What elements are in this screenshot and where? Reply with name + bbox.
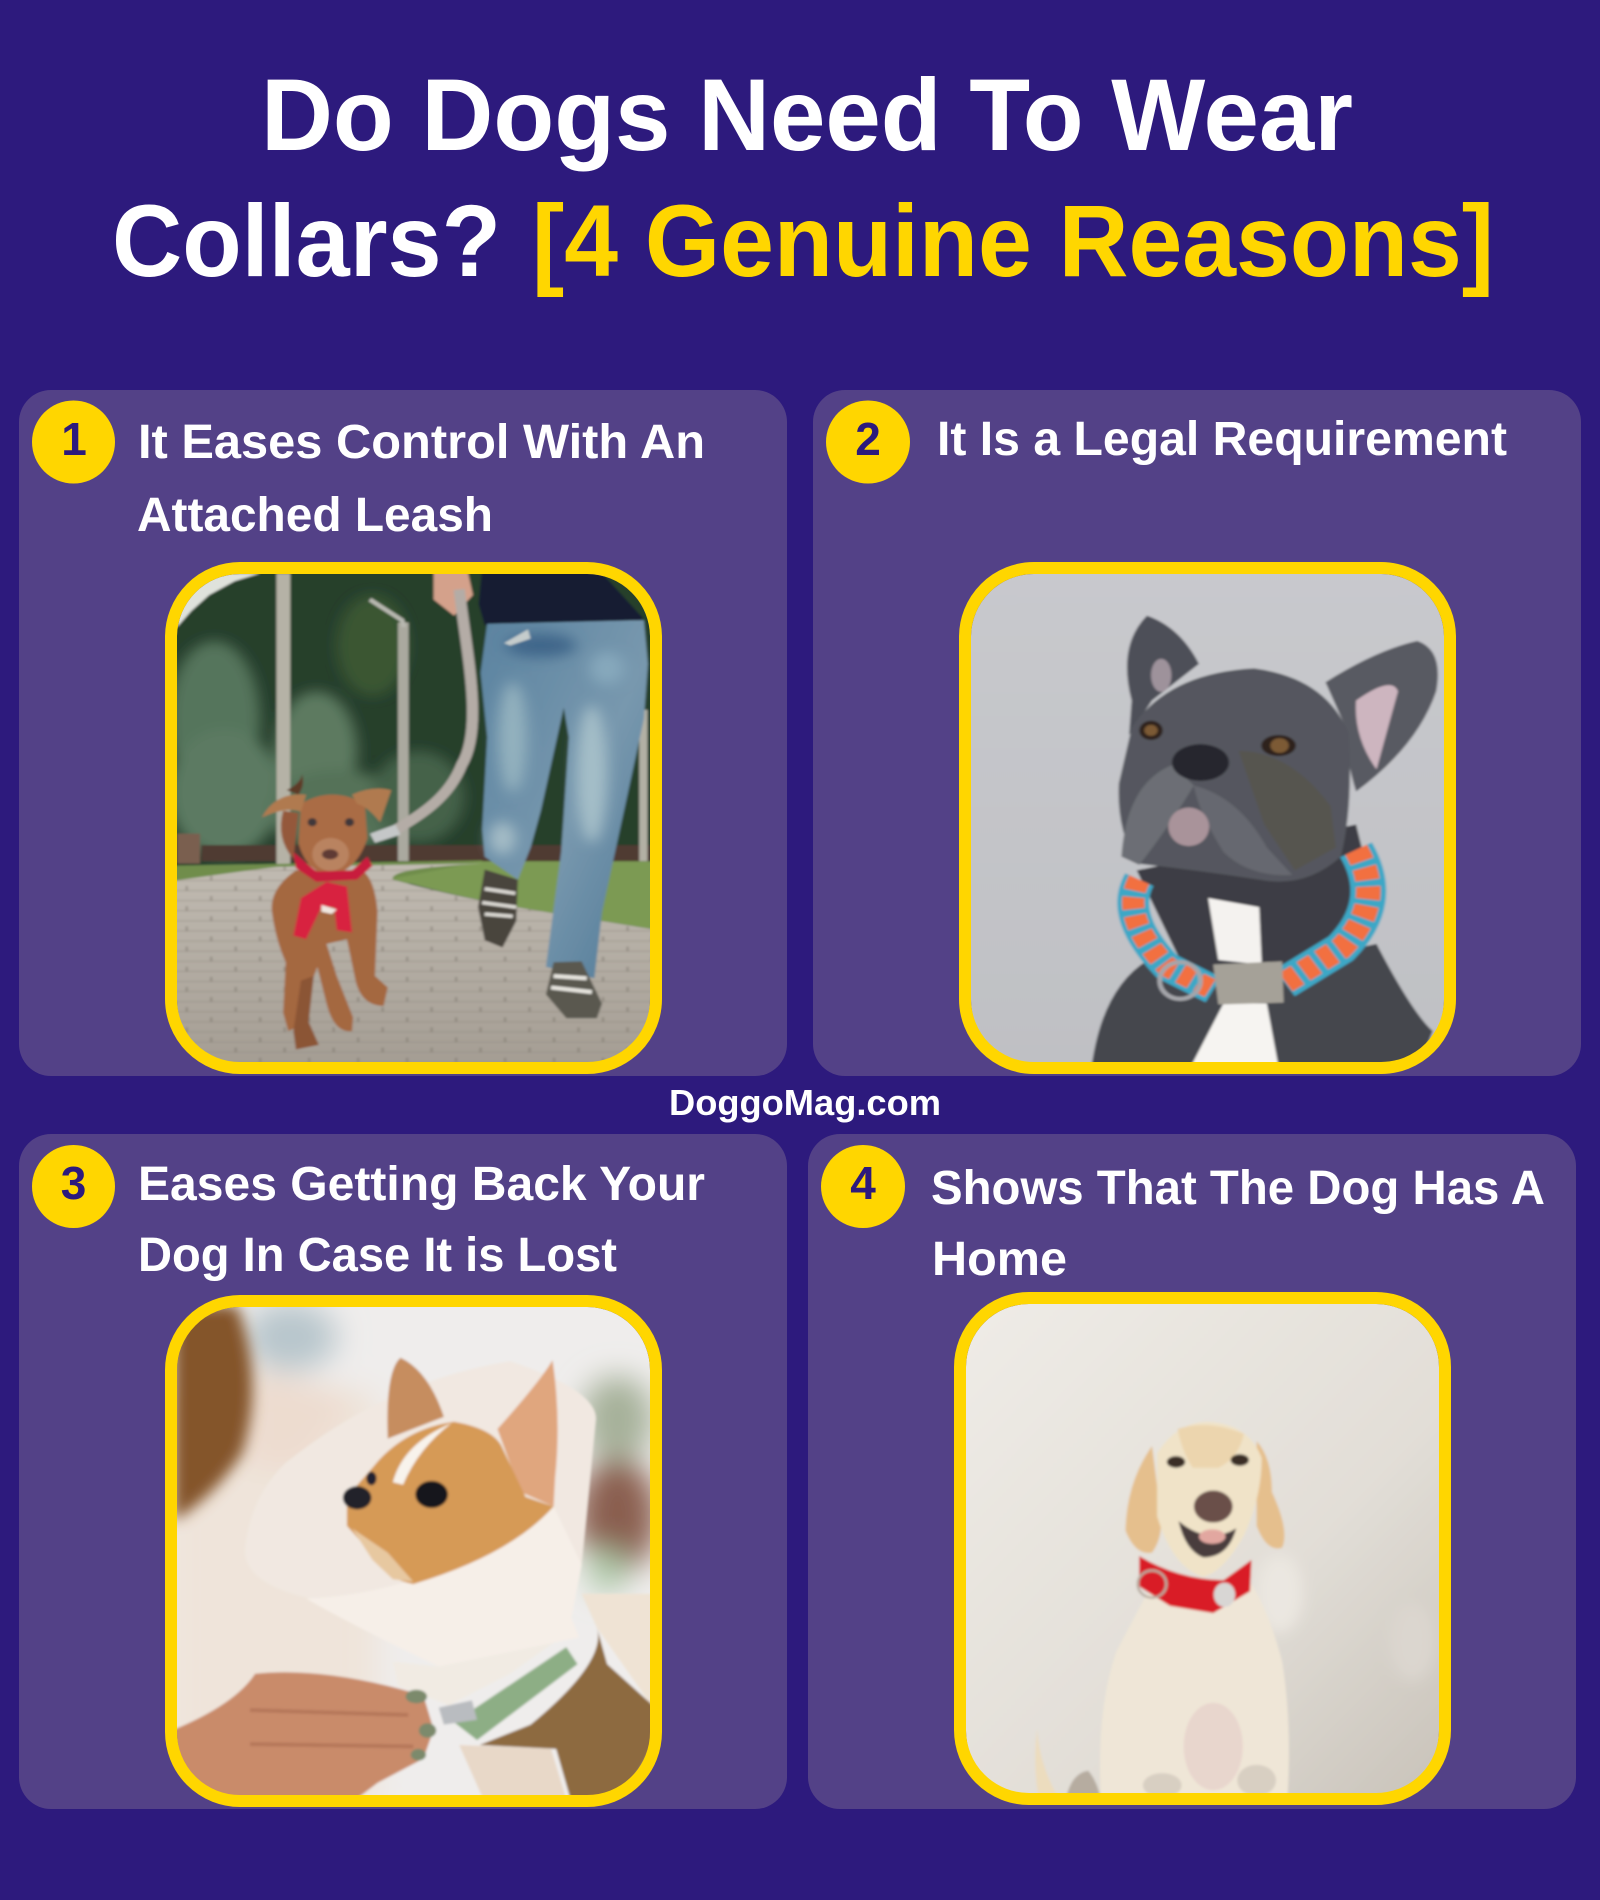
- number badge 2: [826, 400, 910, 484]
- photo: chihuahua in a cone: [163, 1298, 663, 1807]
- heading 4: Shows That The Dog Has A: [931, 1162, 1545, 1215]
- number badge 4: 4: [850, 1157, 876, 1209]
- hand: [168, 1672, 434, 1802]
- collar: [1133, 880, 1213, 990]
- dog head: [387, 1358, 444, 1439]
- site credit: DoggoMag.com: [669, 1082, 941, 1123]
- heading 1: It Eases Control With An: [138, 416, 705, 469]
- number badge 1: [32, 400, 115, 484]
- heading 1: [137, 416, 705, 542]
- panel: reason 4: [808, 1134, 1576, 1809]
- collar: [1139, 1556, 1252, 1613]
- heading 2: It Is a Legal Requirement: [937, 413, 1507, 466]
- heading 1: Attached Leash: [137, 489, 493, 542]
- cone: [270, 1362, 598, 1584]
- photo frame 2: [965, 568, 1450, 1068]
- dog body: [582, 1594, 650, 1704]
- number badge 4: [821, 1145, 905, 1228]
- photo frame 4: [960, 1298, 1445, 1799]
- number badge 1: 1: [61, 413, 87, 465]
- panel: reason 1: [19, 390, 787, 1076]
- number badge 2: 2: [855, 413, 881, 465]
- panel: reason 2: [813, 390, 1581, 1076]
- head: [1119, 668, 1350, 882]
- title line 1: Do Dogs Need To Wear: [261, 58, 1353, 172]
- puppy: [281, 811, 298, 859]
- photo: dog running on a leash: [163, 567, 663, 1072]
- heading 3: Eases Getting Back Your: [138, 1158, 705, 1211]
- heading 4: Home: [932, 1233, 1067, 1286]
- heading 3: [138, 1158, 705, 1282]
- title line 2 yellow: [4 Genuine Reasons]: [532, 184, 1494, 298]
- title line 2 white: Collars?: [112, 184, 501, 298]
- number badge 3: [32, 1145, 115, 1228]
- man: [434, 567, 473, 616]
- heading 3: Dog In Case It is Lost: [138, 1229, 617, 1282]
- ears: [1127, 616, 1199, 735]
- leash: [397, 589, 473, 829]
- photo frame 1: [171, 568, 656, 1068]
- heading 4: [931, 1162, 1545, 1286]
- photo: french bulldog with braided collar: [963, 567, 1463, 1072]
- number badge 3: 3: [61, 1157, 86, 1209]
- photo: smiling dog with red collar: [953, 1296, 1453, 1805]
- ears and head: [1126, 1446, 1161, 1553]
- photo frame 3: [171, 1301, 656, 1801]
- panel: reason 3: [19, 1134, 787, 1809]
- title: [112, 58, 1494, 298]
